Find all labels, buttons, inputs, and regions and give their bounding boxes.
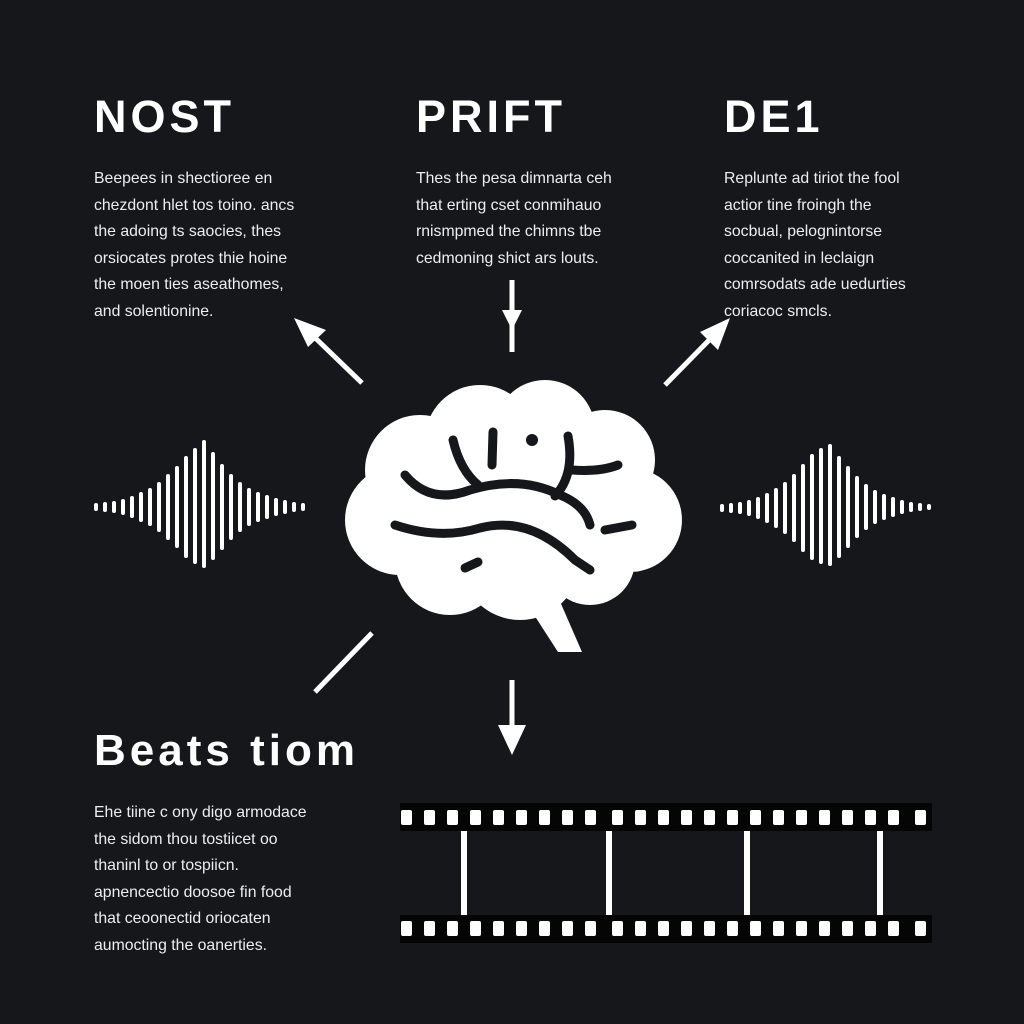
- text block: Beats tiom: thaninl to or tospiicn.: [94, 857, 239, 874]
- icon: waveform right: [722, 446, 929, 564]
- text block: NOST: [94, 170, 294, 320]
- text block: NOST: and solentionine.: [94, 302, 213, 320]
- text block: PRIFT: Thes the pesa dimnarta ceh: [416, 170, 612, 187]
- arrow: top-right: [665, 318, 730, 385]
- title: DE1: DE1: [724, 91, 824, 142]
- title: PRIFT: PRIFT: [416, 91, 566, 142]
- icon: waveform left: [96, 442, 303, 566]
- text block: Beats tiom: the sidom thou tostiicet oo: [94, 830, 278, 848]
- text block: DE1: actior tine froingh the: [724, 196, 872, 214]
- arrow: bottom-center: [498, 680, 526, 755]
- text block: Beats tiom: Ehe tiine c ony digo armodace: [94, 804, 307, 821]
- title: NOST: NOST: [94, 91, 235, 142]
- text block: PRIFT: that erting cset conmihauo: [416, 196, 601, 214]
- text block: NOST: orsiocates protes thie hoine: [94, 250, 287, 266]
- text block: PRIFT: [416, 170, 612, 266]
- text block: NOST: the adoing ts saocies, thes: [94, 223, 281, 240]
- text block: DE1: coccanited in leclaign: [724, 250, 874, 266]
- text block: NOST: Beepees in shectioree en: [94, 170, 272, 187]
- text block: PRIFT: cedmoning shict ars louts.: [416, 250, 599, 266]
- text block: Beats tiom: aumocting the oanerties.: [94, 936, 267, 954]
- arrow: top-left: [294, 318, 362, 383]
- text block: DE1: comrsodats ade uedurties: [724, 276, 906, 293]
- icon: brain: [345, 380, 682, 652]
- text block: DE1: [724, 170, 906, 320]
- icon: film strip: [400, 803, 932, 943]
- text block: DE1: Replunte ad tiriot the fool: [724, 170, 900, 187]
- text block: Beats tiom: apnencectio doosoe fin food: [94, 884, 292, 900]
- text block: DE1: coriacoc smcls.: [724, 302, 832, 320]
- arrow: top-center: [502, 280, 522, 352]
- text block: PRIFT: rnismpmed the chimns tbe: [416, 223, 601, 240]
- text block: DE1: socbual, pelognintorse: [724, 223, 882, 240]
- text block: NOST: chezdont hlet tos toino. ancs: [94, 196, 294, 214]
- title: Beats tiom: Beats tiom: [94, 726, 359, 775]
- text block: NOST: the moen ties aseathomes,: [94, 276, 284, 293]
- text block: Beats tiom: [94, 804, 307, 954]
- line: bottom-left: [315, 633, 372, 692]
- text block: Beats tiom: that ceoonectid oriocaten: [94, 910, 271, 927]
